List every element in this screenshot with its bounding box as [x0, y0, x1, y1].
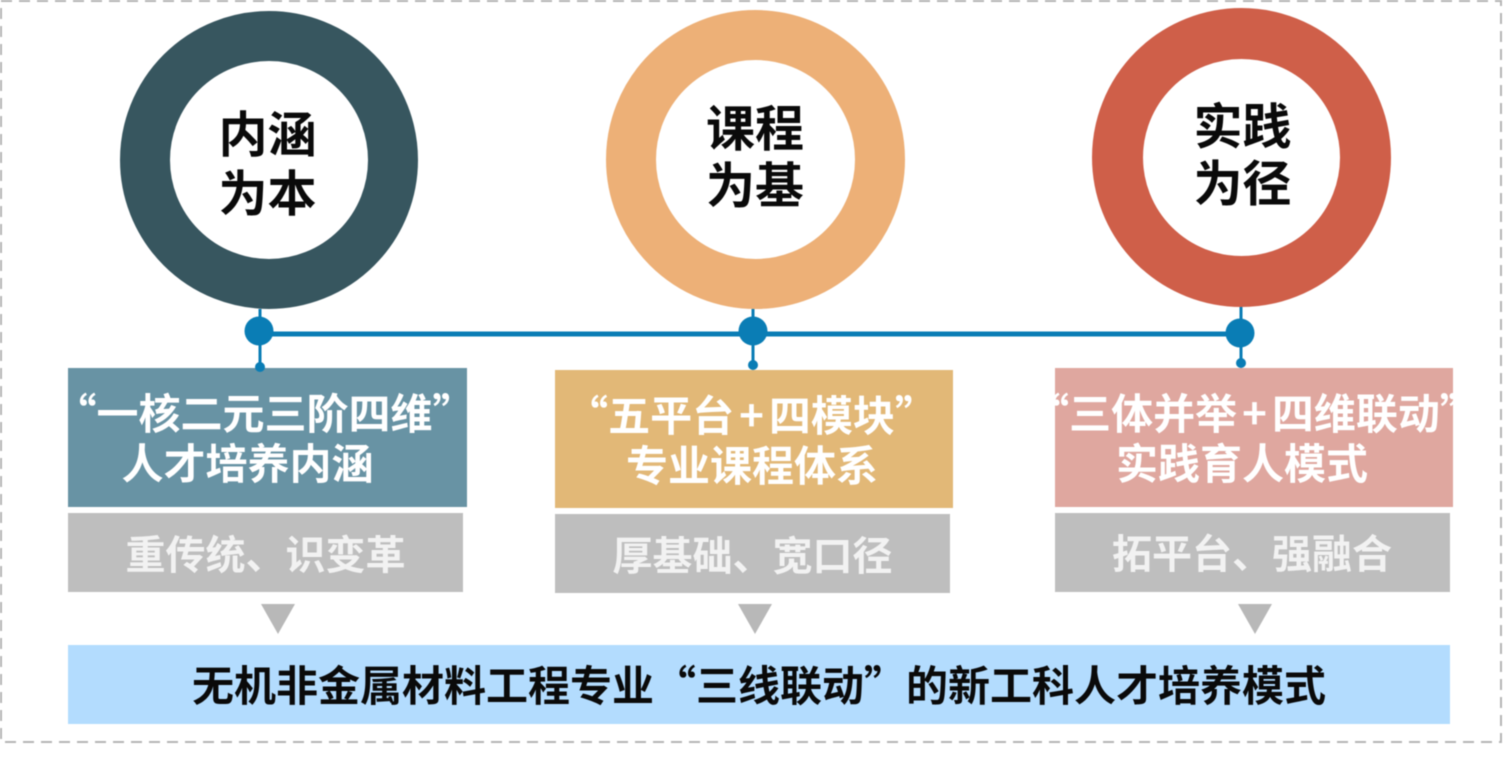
- panel: 厚基础、宽口径: 厚基础、宽口径: [612, 524, 892, 582]
- arrow: right down: [1238, 604, 1272, 634]
- circle: 内涵为本: 为本: [218, 155, 316, 226]
- panel: 拓平台、强融合: [1055, 513, 1450, 592]
- panel: 五平台+四模块: [555, 370, 953, 508]
- panel: 一核二元三阶四维: [68, 368, 467, 507]
- panel: 重传统、识变革: [68, 513, 463, 592]
- banner: 无机非金属材料工程专业“三线联动”的新工科人才培养模式: 无机非金属材料工程专业“三线联动”的新工科人才培养模式: [192, 653, 1326, 714]
- panel: 五平台+四模块: “五平台+四模块”: [566, 383, 937, 444]
- circle: 课程为基: 为基: [706, 146, 804, 218]
- circle: 实践为径: 实践: [1193, 88, 1292, 159]
- panel: 重传统、识变革: 重传统、识变革: [126, 523, 406, 581]
- arrow: middle down: [738, 604, 772, 634]
- banner: 无机非金属材料工程专业“三线联动”的新工科人才培养模式: [68, 645, 1450, 724]
- panel: 三体并举+四维联动: [1055, 368, 1453, 507]
- panel: 五平台+四模块: 专业课程体系: [626, 433, 878, 494]
- circle: 内涵为本: [120, 11, 418, 309]
- panel: 拓平台、强融合: 拓平台、强融合: [1112, 522, 1392, 580]
- panel: 一核二元三阶四维: 人才培养内涵: [121, 431, 374, 492]
- circle: 课程为基: [606, 10, 905, 309]
- circle: 实践为径: [1092, 8, 1391, 307]
- panel: 厚基础、宽口径: [555, 514, 950, 593]
- circle: 实践为径: 为径: [1193, 145, 1292, 216]
- arrow: left down: [261, 604, 295, 634]
- panel: 三体并举+四维联动: 实践育人模式: [1116, 431, 1368, 492]
- circle: 内涵为本: 内涵: [218, 96, 316, 167]
- circle: 课程为基: 课程: [706, 90, 804, 160]
